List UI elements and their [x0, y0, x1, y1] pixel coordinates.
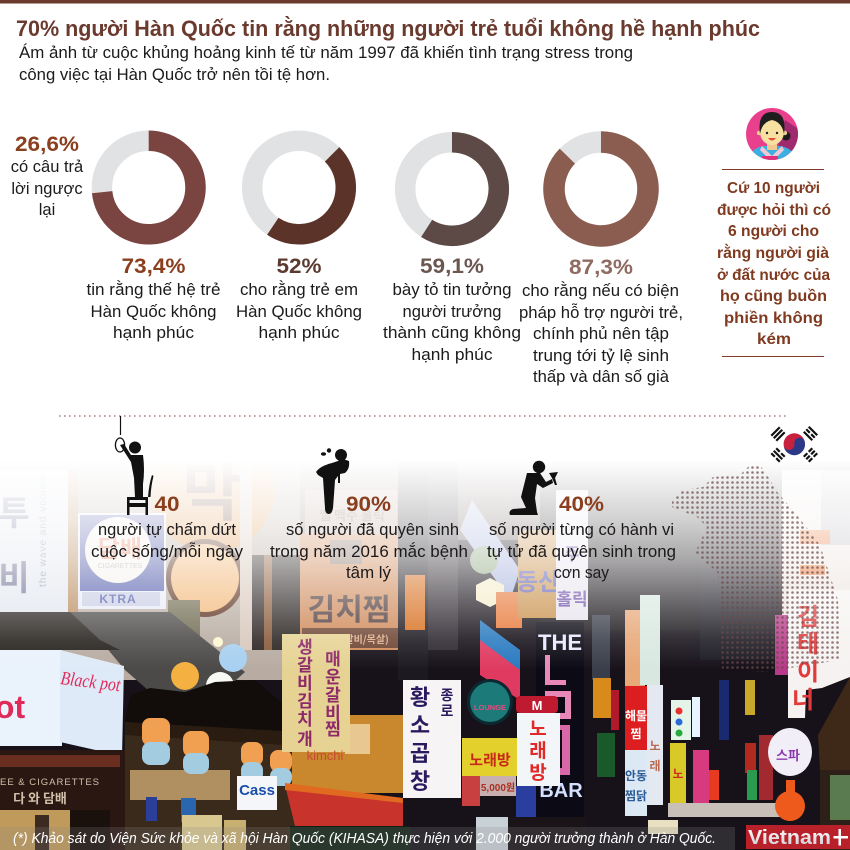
stat: 90%: 90%	[346, 493, 391, 516]
background photo: Seoul street signs at night: 김	[797, 597, 819, 632]
small neon signs right	[745, 743, 756, 773]
stat: 90%	[270, 493, 468, 582]
blue small signs	[146, 797, 157, 821]
background photo: Seoul street signs at night: 치	[297, 705, 313, 730]
background photo: Seoul street signs at night: 태	[797, 624, 819, 659]
stat: 59,1%: hạnh phúc	[412, 346, 492, 364]
background photo: Seoul street signs at night: 해물	[625, 707, 647, 724]
stat: 52%: Hàn Quốc không	[236, 303, 362, 321]
background photo: Seoul street signs at night: 주	[564, 540, 580, 565]
upper right pale signs	[782, 470, 850, 645]
top bar	[0, 0, 850, 4]
background photo: Seoul street signs at night: 안동	[625, 767, 647, 784]
stat: 87,3%: thấp và dân số già	[533, 368, 670, 386]
blue square sign	[78, 513, 166, 609]
background photo: Seoul street signs at night: 로	[441, 701, 454, 721]
stat: 73,4%: 73,4%	[122, 255, 186, 278]
roof slope	[70, 612, 245, 705]
background photo: Seoul street signs at night: 김치찜	[308, 585, 390, 629]
background photo: Seoul street signs at night: 스파	[776, 745, 800, 764]
stat: 40 suicides per day	[91, 493, 244, 561]
kimchi stew sign	[300, 440, 400, 540]
background photo: Seoul street signs at night	[0, 428, 850, 850]
background photo: Seoul street signs at night: 김	[297, 687, 313, 712]
background photo: Seoul street signs at night: 비	[325, 699, 341, 724]
background photo: Seoul street signs at night: 노	[672, 765, 684, 782]
background photo: Seoul street signs at night: CIGARETTES	[98, 563, 143, 570]
background photo: Seoul street signs at night: 찜	[325, 715, 341, 740]
background photo: Seoul street signs at night: 소	[410, 708, 430, 740]
callout: 26,6% opposite answer: 26,6%	[15, 133, 79, 156]
donut chart: 73,4%	[102, 141, 196, 234]
stat: 40 suicides per day: 40	[154, 493, 180, 516]
stat: 52%: 52%	[276, 255, 322, 278]
background photo: Seoul street signs at night: 곱	[410, 736, 430, 768]
stat: 87,3%	[519, 256, 683, 386]
stat: 40% drunk: tự tử đã quyên sinh trong	[487, 543, 676, 561]
Cass beer sign	[237, 776, 277, 810]
background photo: Seoul street signs at night: 래	[649, 757, 661, 774]
narrow bright vertical signs	[592, 615, 610, 680]
callout: elderly also unhappy: được hỏi thì có	[717, 202, 831, 219]
background photo: Seoul street signs at night: 매	[325, 645, 341, 670]
red awning	[285, 785, 403, 826]
hanging lanterns	[142, 718, 292, 786]
hanok roof	[125, 680, 304, 735]
background photo: Seoul street signs at night: 갈	[325, 681, 341, 706]
callout: elderly also unhappy: phiền không	[724, 310, 823, 327]
callout: elderly also unhappy: rằng người già	[717, 243, 829, 262]
callout: elderly also unhappy: ở đất nước của	[717, 267, 830, 284]
background photo: Seoul street signs at night: 노래방	[469, 749, 511, 770]
stat: 87,3%: pháp hỗ trợ người trẻ,	[519, 303, 683, 322]
callout: 26,6% opposite answer	[11, 133, 84, 219]
icon: person on chair with noose	[115, 416, 154, 515]
photo fade overlay	[0, 420, 850, 670]
background photo: Seoul street signs at night: 창	[410, 764, 430, 796]
background photo: Seoul street signs at night: LOUNGE	[474, 703, 506, 712]
round lanterns	[219, 644, 247, 672]
brown roof at right	[818, 677, 850, 770]
orange restaurant wall	[292, 715, 404, 793]
icon: Korean woman avatar	[746, 108, 800, 162]
stat: 90%: trong năm 2016 mắc bệnh	[270, 542, 468, 561]
donut chart: 87,3%	[554, 142, 648, 236]
background photo: Seoul street signs at night: 동산	[516, 562, 560, 597]
stat: 73,4%: tin rằng thế hệ trẻ	[86, 280, 220, 299]
icon: kneeling person drinking	[509, 461, 558, 515]
stat: 87,3%: chính phủ nên tập	[533, 325, 669, 343]
background photo: Seoul street signs at night: (삼겹/목갈비/목살)	[309, 631, 389, 646]
stat: 59,1%: thành cũng không	[383, 324, 521, 342]
white jongno sign	[403, 680, 461, 798]
dark shop front	[0, 750, 125, 850]
left pale sign	[0, 470, 70, 616]
bottom street banner	[668, 803, 798, 817]
galbi sign	[282, 634, 350, 752]
callout: 26,6% opposite answer: có câu trả	[11, 158, 84, 176]
background photo: Seoul street signs at night: 찜닭	[625, 787, 647, 804]
left lit sign: Black pot	[0, 650, 62, 746]
subtitle: Ám ảnh từ cuộc khủng hoảng kinh tế từ năm 1997 đã khiến tình trạng stress trong	[19, 43, 633, 62]
background photo: Seoul street signs at night: kimchi	[307, 748, 344, 763]
stat: 40 suicides per day: người tự chấm dứt	[98, 521, 236, 539]
background photo: Seoul street signs at night: 생	[297, 633, 313, 658]
stat: 40% drunk: 40%	[559, 493, 604, 516]
stat: 52%	[236, 255, 362, 342]
stat: 40% drunk	[487, 493, 676, 582]
background photo: Seoul street signs at night: THE	[538, 630, 582, 655]
stat: 40% drunk: số người từng có hành vi	[489, 521, 674, 539]
stat: 73,4%: hạnh phúc	[113, 324, 194, 342]
background photo: Seoul street signs at night: KTRA	[99, 592, 137, 606]
callout: 26,6% opposite answer: lời ngược	[11, 180, 83, 198]
stat: 59,1%	[383, 255, 521, 364]
stat: 59,1%: bày tỏ tin tưởng	[392, 281, 512, 299]
background photo: Seoul street signs at night: 갈	[297, 651, 313, 676]
stat: 59,1%: 59,1%	[420, 255, 484, 278]
background photo: Seoul street signs at night: 이	[797, 652, 819, 687]
the lounge tall black sign	[536, 622, 584, 822]
stat: 52%: cho rằng trẻ em	[240, 280, 358, 299]
stat: 59,1%: người trưởng	[402, 303, 502, 321]
map of South Korea, dotted	[672, 465, 840, 672]
background photo: Seoul street signs at night: 노	[529, 714, 547, 741]
background photo: Seoul street signs at night: Black pot	[59, 668, 122, 696]
stat: 73,4%: Hàn Quốc không	[90, 303, 216, 321]
background photo: Seoul street signs at night: M	[532, 698, 542, 713]
stat: 40% drunk: cơn say	[554, 564, 610, 582]
right white sign with red letters	[775, 615, 789, 675]
logo: Vietnam+: Vietnam	[748, 827, 831, 849]
round lounge sign	[467, 679, 513, 725]
background photo: Seoul street signs at night: 노	[649, 737, 661, 754]
stat: 90%: tâm lý	[346, 564, 392, 582]
background photo: Seoul street signs at night: EE & CIGARETTES	[0, 777, 100, 788]
background photo: Seoul street signs at night: the wave and volume	[38, 473, 49, 587]
callout: elderly also unhappy: Cứ 10 người	[727, 180, 820, 197]
background photo: Seoul street signs at night: Cass	[239, 782, 275, 799]
background photo: Seoul street signs at night: 비	[297, 669, 313, 694]
stat: 87,3%: trung tới tỷ lệ sinh	[533, 347, 669, 365]
grey wall and window column	[240, 440, 252, 650]
stat: 73,4%	[86, 255, 220, 342]
background photo: Seoul street signs at night: 황	[410, 680, 430, 712]
background photo: Seoul street signs at night: 막	[183, 442, 241, 534]
stat: 90%: số người đã quyên sinh	[286, 521, 459, 539]
small round sign	[166, 539, 244, 617]
footnote	[0, 827, 735, 850]
background photo: Seoul street signs at night: 개	[297, 725, 313, 750]
stat: 87,3%: 87,3%	[569, 256, 633, 279]
logo: Vietnam+	[746, 825, 850, 849]
big orange round sign	[150, 428, 274, 552]
callout: elderly also unhappy: kém	[757, 331, 791, 348]
callout: elderly also unhappy	[717, 170, 831, 356]
background photo: Seoul street signs at night: 너	[792, 680, 814, 715]
title: 70% người Hàn Quốc tin rằng những người trẻ tuổi không hề hạnh phúc	[16, 16, 760, 41]
wooden hanok wall	[125, 720, 295, 850]
subtitle: công việc tại Hàn Quốc trở nên tồi tệ hơn.	[19, 66, 330, 84]
donut chart: 52%	[252, 141, 346, 234]
background photo: Seoul street signs at night: 방	[529, 758, 547, 785]
background photo: Seoul street signs at night: 종	[441, 685, 454, 705]
background photo: Seoul street signs at night: 다 와 담배	[13, 788, 67, 807]
noraebang signs	[462, 738, 518, 776]
icon: South Korean flag	[771, 426, 818, 462]
background photo: Seoul street signs at night: 5,000원	[481, 781, 515, 794]
background photo: Seoul street signs at night: 쌜 맥주 홀릭	[319, 505, 385, 524]
background photo: Seoul street signs at night: BAR	[539, 780, 583, 802]
callout: elderly also unhappy: họ cũng buồn	[720, 288, 827, 305]
background photo: Seoul street signs at night: 래	[529, 736, 547, 763]
icon: distressed person holding head	[316, 448, 349, 514]
background photo: Seoul street signs at night: 운	[325, 663, 341, 688]
callout: 26,6% opposite answer: lại	[39, 201, 55, 219]
background photo: Seoul street signs at night: 홀릭	[556, 585, 588, 610]
middle upper signs	[428, 440, 458, 650]
footnote: (*) Khảo sát do Viện Sức khỏe và xã hội Hàn Quốc (KIHASA) thực hiện với 2.000 người trưởng thành ở Hàn Quốc.	[13, 830, 716, 847]
stat: 52%: hạnh phúc	[258, 324, 340, 342]
callout: elderly also unhappy: 6 người cho	[728, 223, 819, 240]
donut chart: 59,1%	[405, 142, 499, 236]
subtitle	[19, 43, 633, 84]
background photo: Seoul street signs at night: 찜	[630, 725, 642, 742]
background photo: Seoul street signs at night: 담배	[98, 529, 142, 564]
stat: 40 suicides per day: cuộc sống/mỗi ngày	[91, 542, 244, 561]
stat: 87,3%: cho rằng nếu có biện	[522, 281, 679, 300]
